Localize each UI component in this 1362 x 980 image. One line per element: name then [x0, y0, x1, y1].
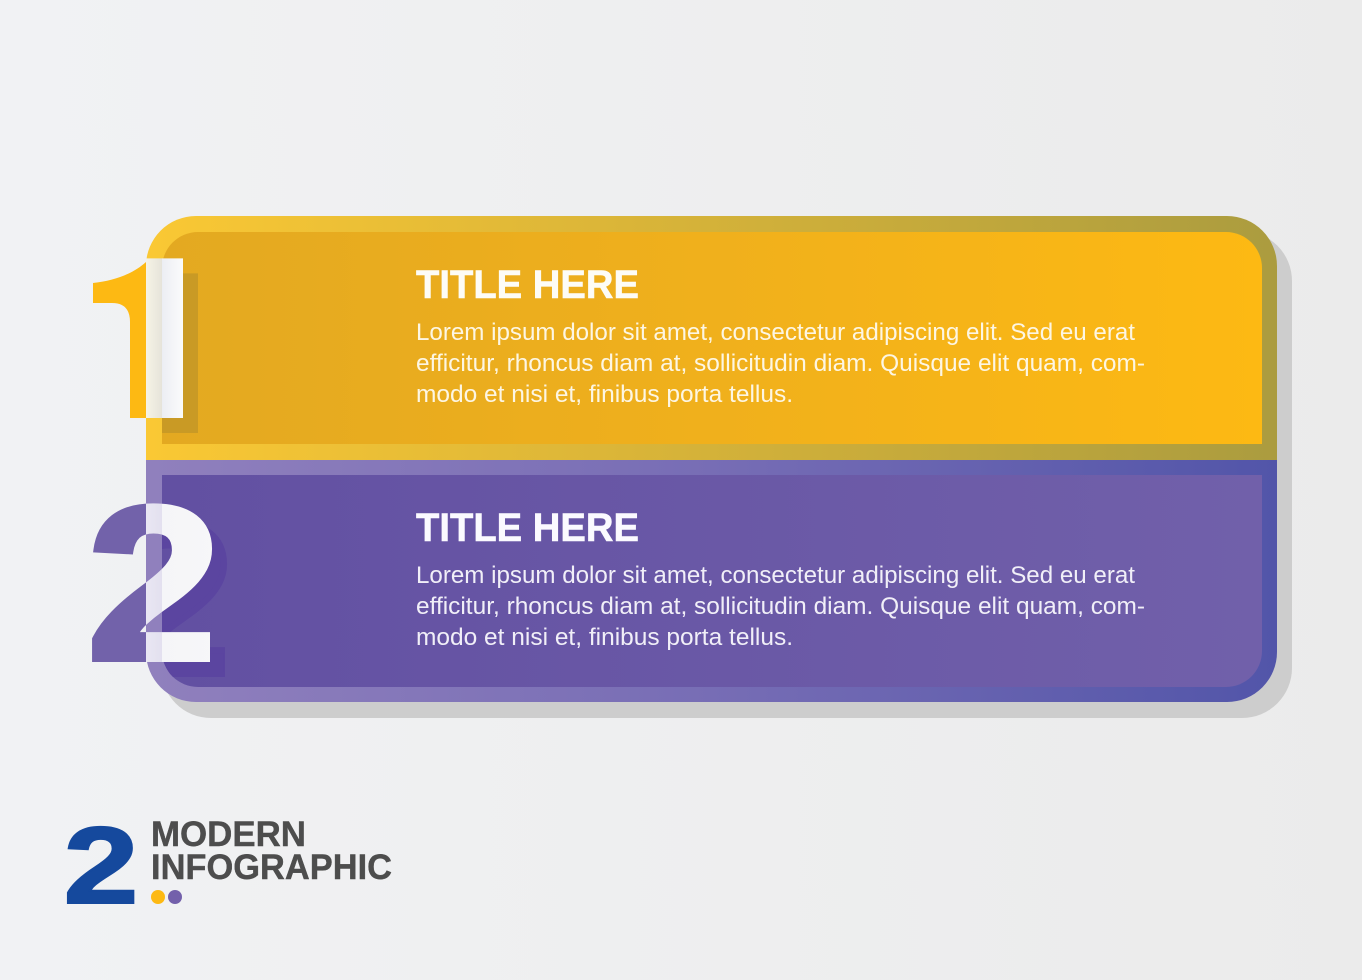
yellow panel inner	[162, 232, 1262, 444]
body text 1: efficitur, rhoncus diam at, sollicitudin diam. Quisque elit quam, com-	[416, 350, 1145, 377]
purple panel frame	[146, 460, 1277, 702]
number 1: 1	[21, 209, 275, 468]
logo dots	[151, 890, 182, 904]
panel: step 2	[87, 460, 1277, 722]
number 2 shadow: 2	[102, 476, 236, 722]
logo wordmark	[151, 815, 392, 887]
body text 1: Lorem ipsum dolor sit amet, consectetur adipiscing elit. Sed eu erat	[416, 319, 1135, 346]
body text 2: efficitur, rhoncus diam at, sollicitudin diam. Quisque elit quam, com-	[416, 593, 1145, 620]
card shadow	[161, 231, 1292, 718]
body text 2	[416, 562, 1145, 651]
body text 2: Lorem ipsum dolor sit amet, consectetur adipiscing elit. Sed eu erat	[416, 562, 1135, 589]
number 1 flag	[93, 262, 146, 418]
yellow panel frame	[146, 216, 1277, 460]
logo wordmark: INFOGRAPHIC	[151, 848, 392, 887]
number 2: 2	[87, 461, 221, 707]
footer logo	[64, 805, 392, 927]
title 2: TITLE HERE	[416, 506, 639, 550]
title 1: TITLE HERE	[416, 263, 639, 307]
number 1 shadow: 1	[36, 224, 290, 483]
body text 2: modo et nisi et, finibus porta tellus.	[416, 624, 793, 651]
purple panel inner	[162, 475, 1262, 687]
logo wordmark: MODERN	[151, 815, 306, 854]
body text 1: modo et nisi et, finibus porta tellus.	[416, 381, 793, 408]
logo numeral 2: 2	[64, 805, 138, 927]
body text 1	[416, 319, 1145, 408]
panel: step 1	[93, 216, 1277, 460]
